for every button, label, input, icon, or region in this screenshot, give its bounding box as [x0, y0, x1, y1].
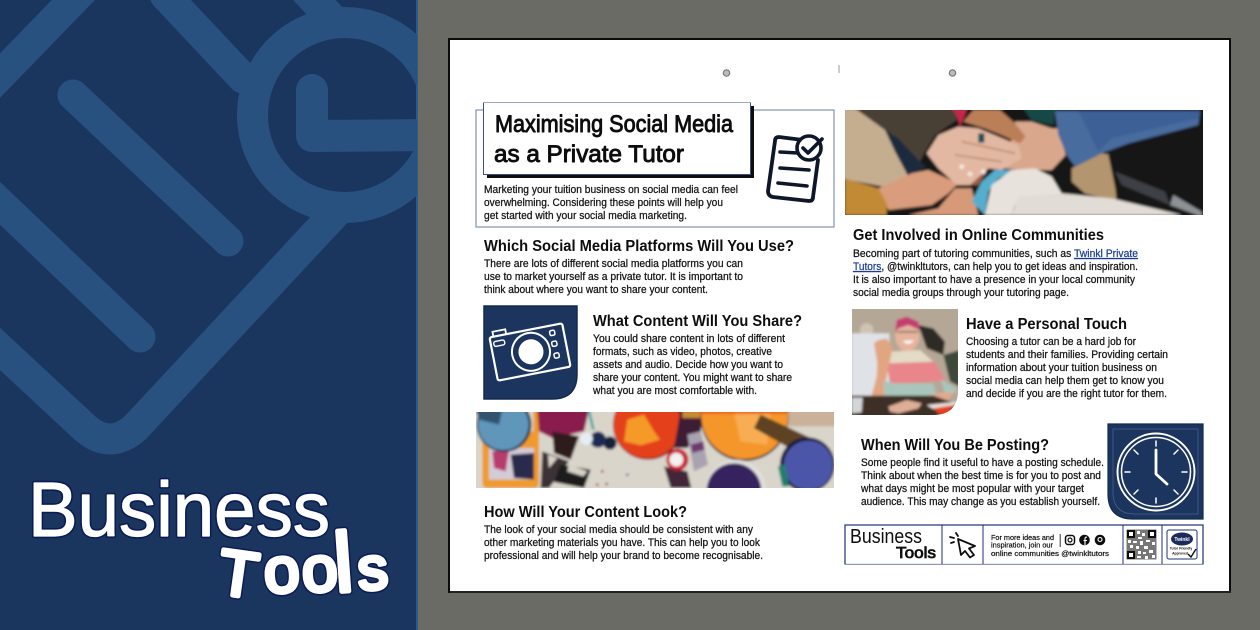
image: stacked hands — [845, 110, 1203, 215]
image: paint pots — [476, 412, 834, 488]
title: as a Private Tutor — [494, 141, 684, 168]
badge: Twinkl approved — [1167, 530, 1197, 559]
crop marks — [723, 65, 956, 76]
section: content: assets and audio. Decide how you want to — [593, 359, 783, 371]
title: Maximising Social Media — [495, 111, 734, 138]
section: posting: what days might be most popular with your target — [860, 483, 1084, 495]
intro text — [484, 184, 738, 222]
footer call to action — [991, 533, 1109, 558]
section: content: share your content. You might want to share — [593, 372, 792, 384]
section: communities — [853, 227, 1138, 299]
panel: document sheet — [449, 39, 1231, 593]
QR code — [1126, 530, 1156, 560]
panel: left cover — [0, 0, 440, 630]
panel: title and intro — [476, 102, 834, 227]
footer banner — [845, 525, 1203, 564]
intro text: overwhelming. Considering these points will help you — [484, 197, 723, 209]
footer call to action: For more ideas and — [991, 533, 1054, 542]
footer logo: Business — [850, 526, 922, 548]
title — [494, 111, 734, 168]
section: communities: It is also important to have a presence in your local community — [853, 274, 1136, 286]
section: personal touch: Have a Personal Touch — [966, 316, 1127, 333]
footer logo: Tools — [896, 545, 936, 562]
icon: camera tile — [484, 306, 577, 399]
section: communities: Becoming part of tutoring communities, such as Twinkl Private — [853, 248, 1138, 260]
section: look — [484, 504, 763, 562]
section: look: other marketing materials you have. This can help you to look — [484, 537, 761, 549]
section: look: The look of your social media should be consistent with any — [484, 524, 754, 536]
heading: Business Tools: s — [355, 534, 390, 603]
badge: Twinkl approved: Twinkl — [1174, 537, 1190, 543]
heading: Business Tools: s — [355, 534, 390, 603]
section: look: How Will Your Content Look? — [484, 504, 687, 521]
section: platforms: think about where you want to share your content. — [484, 284, 708, 296]
icon: cursor — [950, 533, 975, 558]
section: personal touch: Choosing a tutor can be a hard job for — [966, 336, 1136, 348]
footer call to action: online communities @twinkltutors — [991, 549, 1109, 558]
icon: checklist — [768, 136, 822, 201]
heading: Business Tools: Too — [214, 532, 339, 612]
icon: large checklist watermark — [0, 0, 440, 439]
section: platforms: There are lots of different social media platforms you can — [484, 258, 743, 270]
section: content — [592, 313, 802, 397]
section: posting: Think about when the best time is for you to post and — [861, 470, 1101, 482]
section: personal touch: students and their families. Providing certain — [966, 349, 1168, 361]
footer call to action: inspiration, join our — [991, 540, 1053, 550]
icons: social media — [1060, 534, 1105, 547]
section: platforms — [484, 238, 794, 296]
section: platforms: Which Social Media Platforms Will You Use? — [484, 238, 794, 255]
intro text: get started with your social media marketing. — [484, 210, 687, 222]
section: content: what you are most comfortable with. — [592, 385, 757, 397]
image: tutor waving — [850, 307, 962, 418]
section: platforms: use to market yourself as a private tutor. It is important to — [484, 271, 743, 283]
badge: Twinkl approved: Tutor Friendly — [1170, 546, 1192, 550]
section: content: You could share content in lots of different — [593, 333, 785, 345]
footer logo — [850, 526, 936, 562]
badge: Twinkl approved: Approved — [1172, 552, 1188, 556]
section: posting: When Will You Be Posting? — [861, 437, 1049, 454]
section: communities: Tutors, @twinkltutors, can help you to get ideas and inspiration. — [853, 261, 1138, 273]
heading: Business Tools — [28, 467, 390, 612]
heading: Business Tools: Business — [28, 467, 330, 553]
section: communities: social media groups through your tutoring page. — [853, 287, 1069, 299]
section: look: professional and will help your brand to become recognisable. — [484, 550, 763, 562]
heading: Business Tools: l — [331, 515, 356, 610]
section: communities: Get Involved in Online Communities — [853, 227, 1104, 244]
section: posting: Some people find it useful to have a posting schedule. — [861, 457, 1104, 469]
section: posting: audience. This may change as you establish yourself. — [861, 496, 1100, 508]
intro text: Marketing your tuition business on social media can feel — [484, 184, 738, 196]
icon: clock tile — [1108, 424, 1203, 519]
section: content: formats, such as video, photos, creative — [593, 346, 772, 358]
heading: Business Tools: Too — [214, 532, 339, 612]
section: content: What Content Will You Share? — [593, 313, 802, 330]
section: personal touch: and decide if you are the right tutor for them. — [966, 388, 1167, 400]
heading: Business Tools: l — [331, 515, 356, 610]
section: personal touch: information about your tuition business on — [966, 362, 1157, 374]
section: posting — [860, 437, 1104, 508]
heading: Business Tools: Business — [28, 467, 330, 553]
section: personal touch: social media can help them get to know you — [966, 375, 1164, 387]
section: personal touch — [966, 316, 1168, 400]
